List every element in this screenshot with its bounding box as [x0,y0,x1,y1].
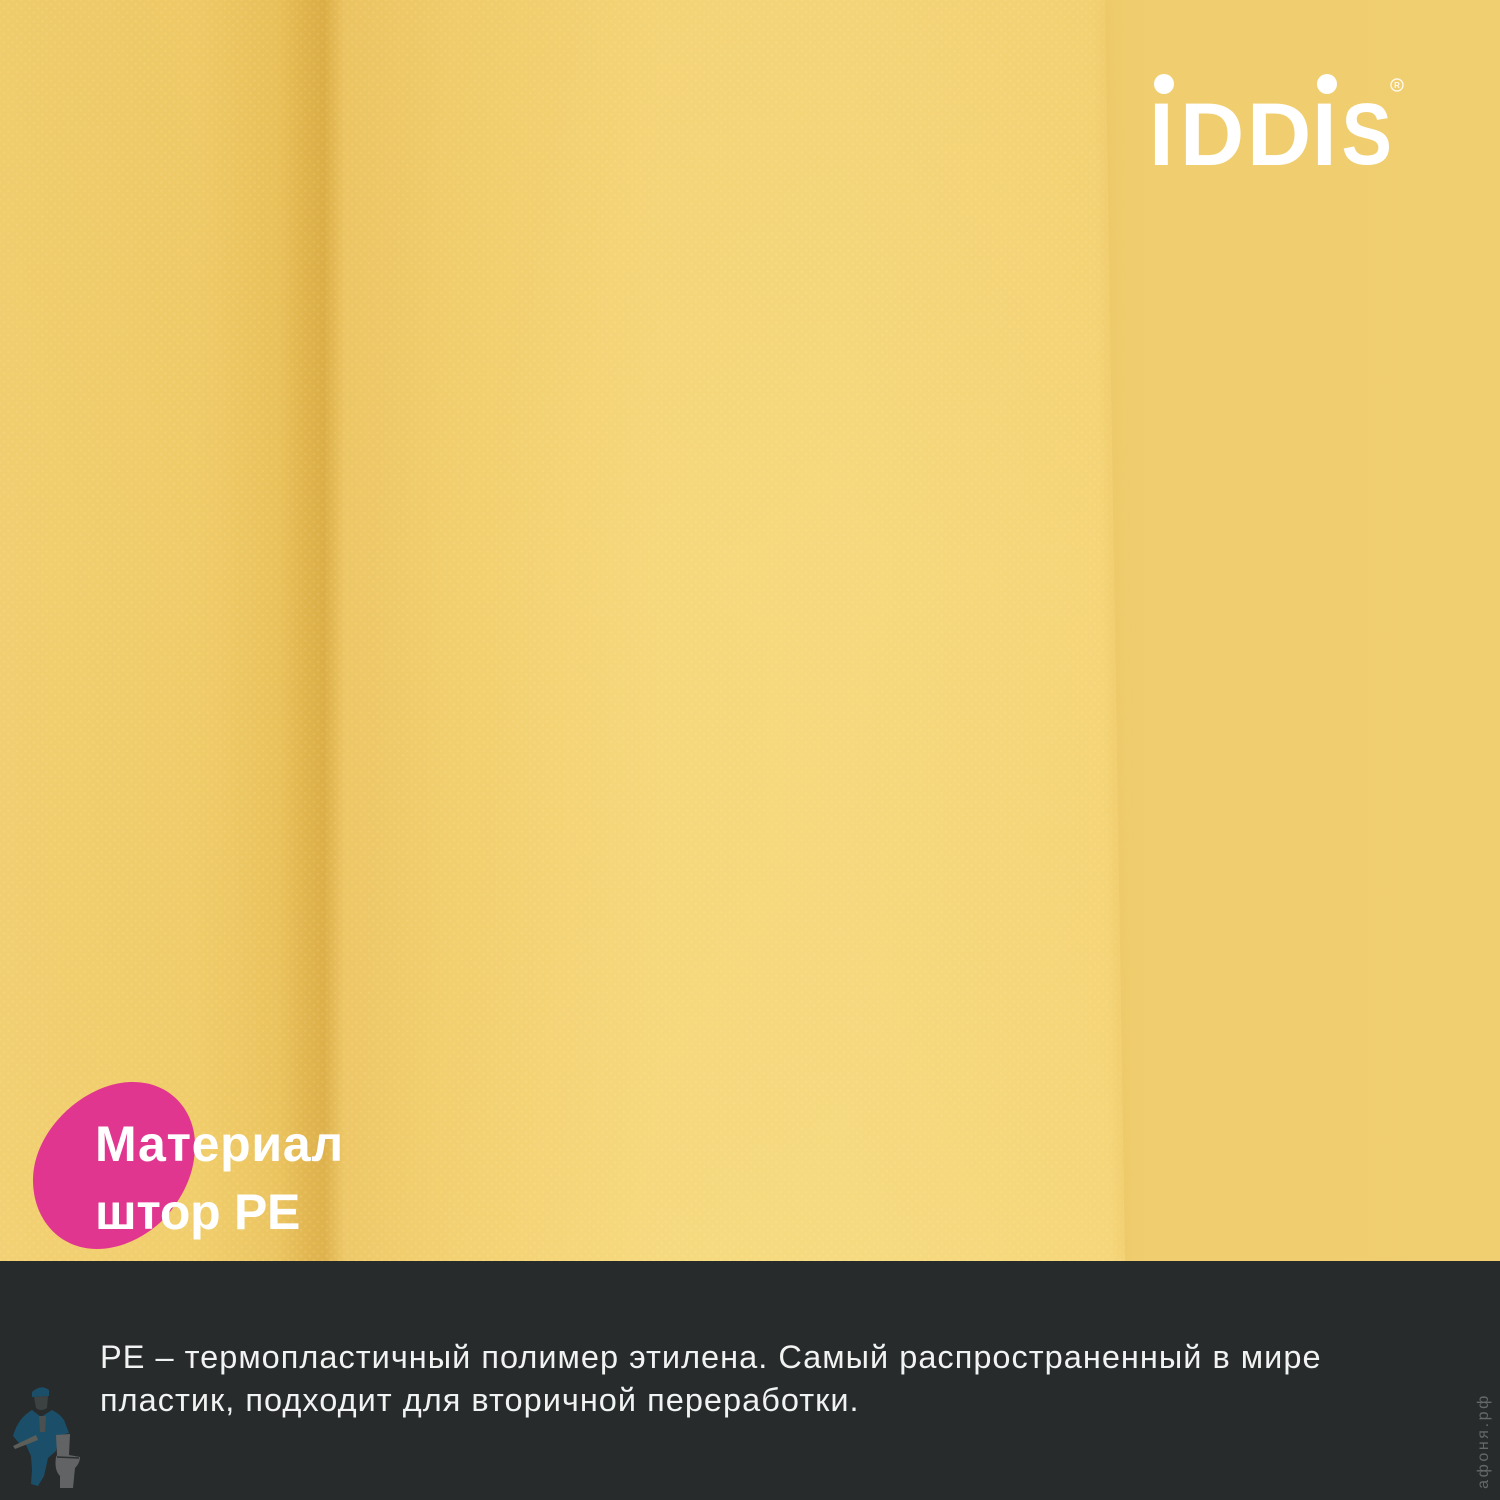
logo: IDDIS: R [1394,81,1400,90]
pink blob behind heading [33,1082,195,1249]
text block: description: PE – термопластичный полимер этилена. Самый распространенный в мире [100,1339,1322,1375]
icon: plumber with toilet [13,1387,80,1488]
heading: штор PE [95,1184,300,1240]
heading [95,1116,344,1240]
panel: dark caption bar [0,1261,1500,1500]
text block: description [100,1339,1322,1418]
text block: description: пластик, подходит для вторичной переработки. [100,1382,860,1418]
heading: Материал [95,1116,344,1172]
watermark: афоня.рф [1475,1393,1492,1489]
logo: IDDIS [1149,74,1404,180]
